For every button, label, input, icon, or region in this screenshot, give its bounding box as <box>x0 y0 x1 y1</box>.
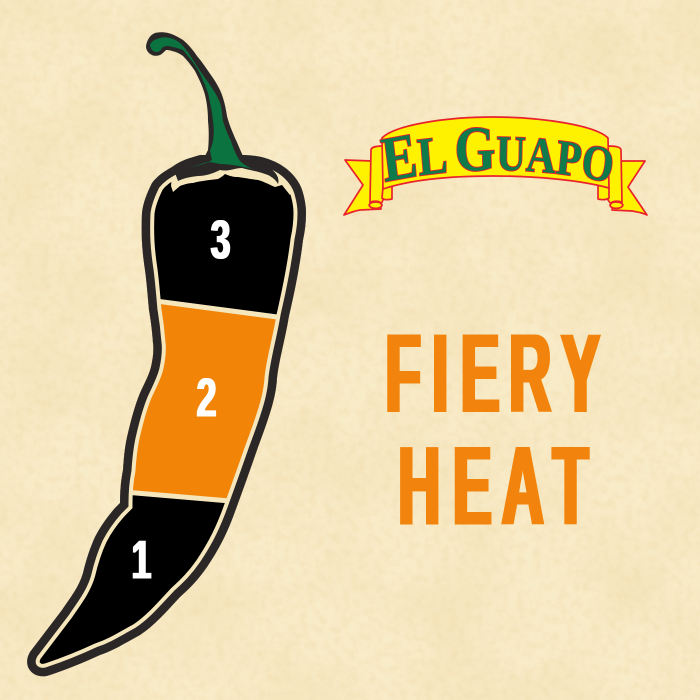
banner right tail <box>612 161 647 215</box>
chili pepper heat chart <box>20 32 320 690</box>
banner left fold <box>382 184 392 200</box>
pepper section 3: black top <box>27 155 306 676</box>
logo wordmark: EL GUAPO <box>380 127 613 183</box>
dividers between sections <box>120 299 289 504</box>
pepper calyx <box>175 155 278 184</box>
banner main arch <box>382 117 609 189</box>
banner left roll <box>369 146 383 208</box>
pepper stem green fill <box>150 37 253 169</box>
number 3: 3 <box>211 209 230 270</box>
banner left tail <box>344 160 381 215</box>
pepper dark outer outline <box>27 155 306 676</box>
pepper section 2: orange middle <box>120 302 288 502</box>
pepper stem outline <box>146 32 243 156</box>
heading line 2: HEAT <box>398 423 588 549</box>
banner right fold <box>598 184 609 200</box>
number 2: 2 <box>197 367 216 428</box>
El Guapo logo banner <box>343 116 648 216</box>
banner right roll <box>608 146 623 208</box>
cream band under calyx <box>171 155 296 195</box>
number 1: 1 <box>132 529 151 590</box>
pepper cream inner outline <box>27 155 306 676</box>
heading: FIERY HEAT <box>385 310 600 549</box>
heading line 1: FIERY <box>385 310 600 436</box>
